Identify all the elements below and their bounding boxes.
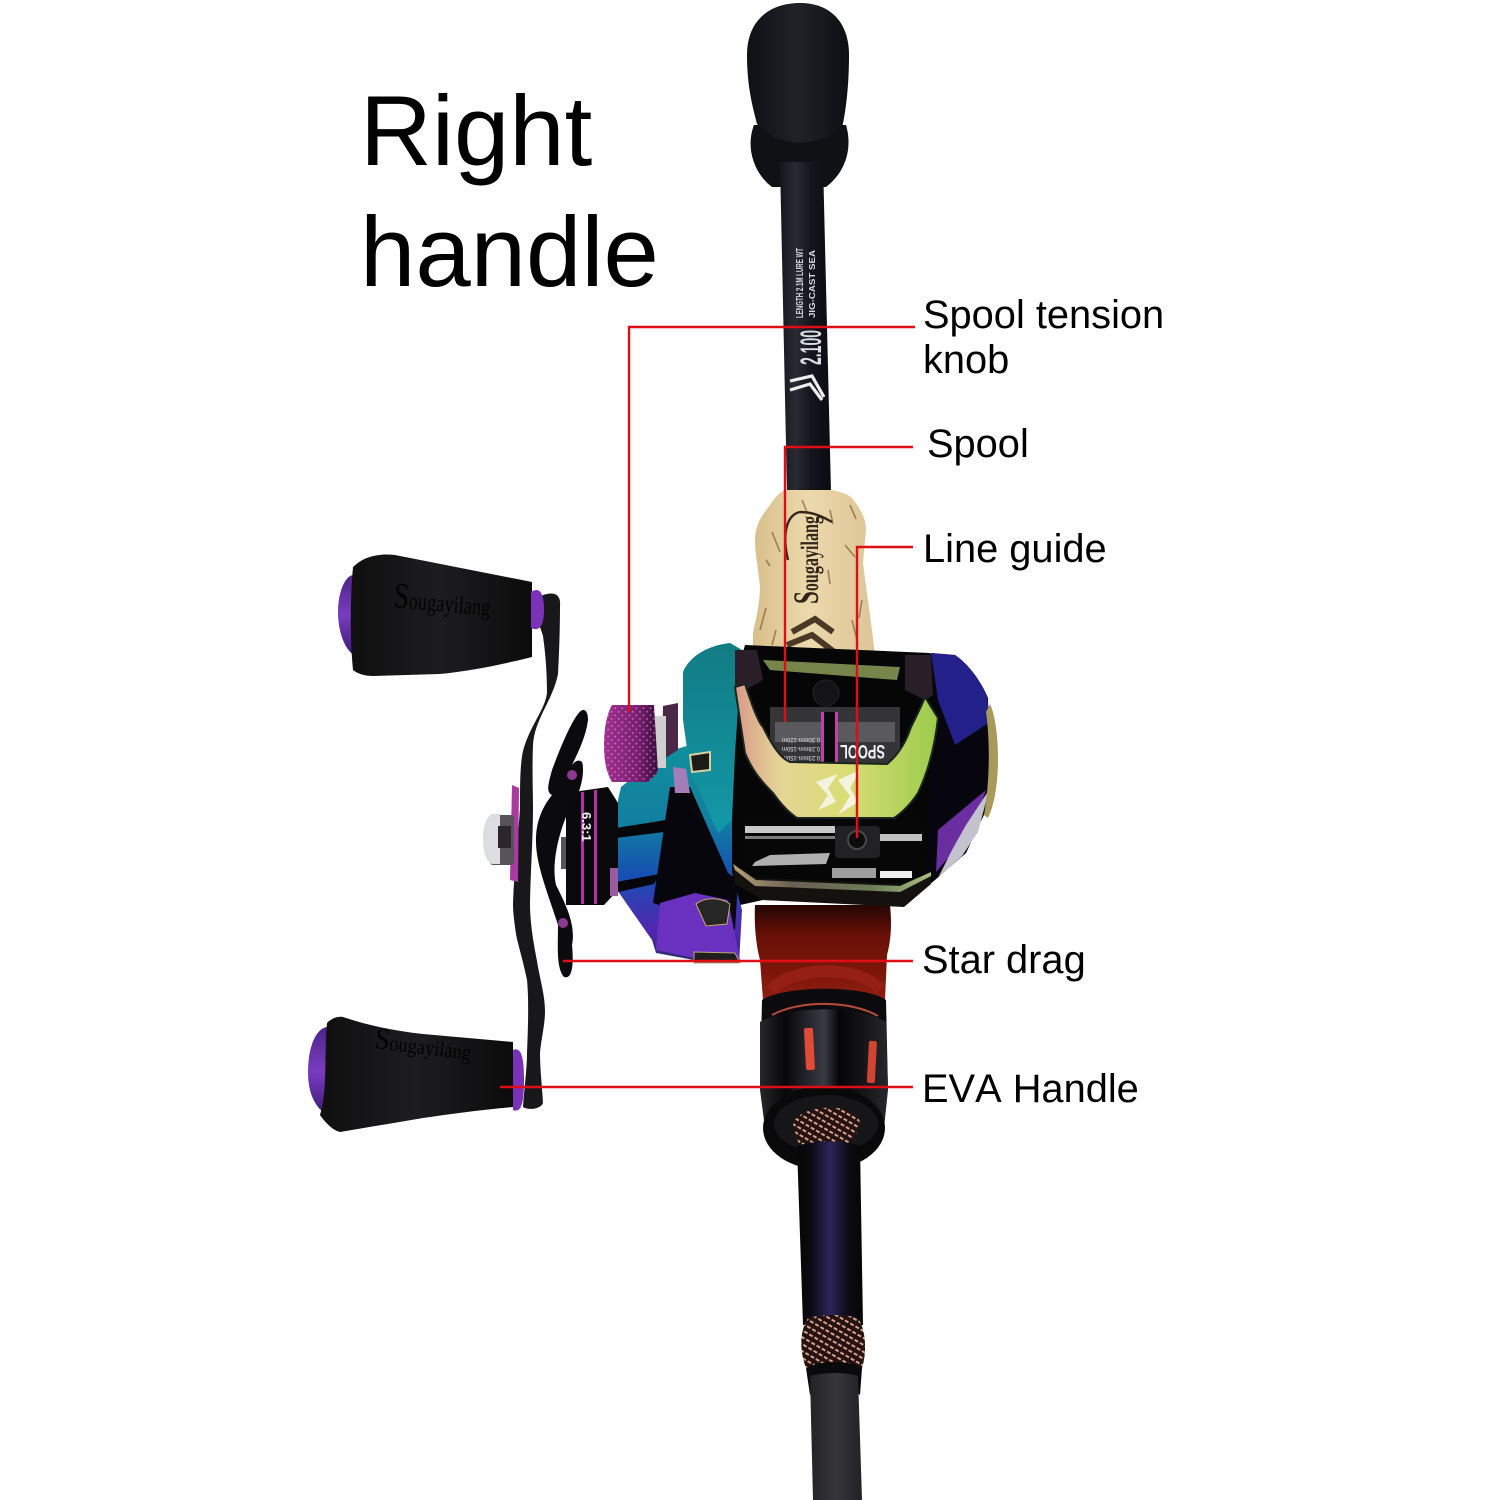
callout: Star drag: Star drag xyxy=(922,938,1086,982)
star drag xyxy=(536,710,588,977)
callout: Spool tension knob: knob xyxy=(923,338,1009,382)
collar rim with braided winding xyxy=(763,1086,885,1170)
reel: spool window xyxy=(763,660,900,767)
spool tension knob xyxy=(604,703,678,782)
rod blank with printed markings xyxy=(780,162,831,492)
spool: 0.28mm-150m xyxy=(782,745,820,752)
rod blank with printed markings: 2.100 xyxy=(795,330,828,365)
reel seat highlight arc xyxy=(771,971,880,990)
lower handle knob: Sougayilang xyxy=(373,1022,474,1067)
spool: 0.23mm-150m xyxy=(782,754,820,761)
reel: gear-side housing xyxy=(615,643,742,963)
callout: Line guide: Line guide xyxy=(923,527,1107,571)
reel: right side plate xyxy=(925,653,998,880)
star drag purple accents xyxy=(558,770,577,928)
cork handle with logo xyxy=(753,490,876,665)
frame logo chevrons xyxy=(816,770,860,815)
callout: Spool: Spool xyxy=(927,422,1029,466)
spool: 0.30mm-120m xyxy=(782,736,820,743)
reel: level wind with line guide xyxy=(745,820,925,878)
upper teal plate xyxy=(683,643,742,833)
rear grip flange xyxy=(751,125,849,187)
callout: Spool xyxy=(785,422,1029,722)
reel: lower iridescent strip xyxy=(732,863,931,907)
callout: EVA Handle: EVA Handle xyxy=(922,1067,1139,1111)
upper handle knob: Sougayilang xyxy=(392,575,492,623)
title: Right handle: handle xyxy=(360,197,659,308)
upper handle knob xyxy=(338,555,544,676)
reel: body base silhouette xyxy=(732,645,990,905)
callout: Spool tension knob xyxy=(629,293,1164,712)
rod blank with printed markings: JIG-CAST SEA xyxy=(808,250,817,318)
spool: SPOOL xyxy=(840,740,885,761)
gear collar with ratio text xyxy=(561,787,618,905)
lower handle knob xyxy=(308,1017,524,1132)
reel seat black locking collar xyxy=(760,989,888,1128)
reel seat red section xyxy=(755,905,891,1000)
reel: U-shaped iridescent frame xyxy=(735,650,938,818)
cork logo text: Sougayilang xyxy=(786,516,826,604)
cork logo swoosh xyxy=(785,512,832,560)
handle nut xyxy=(483,785,519,882)
callout: Spool tension knob: Spool tension xyxy=(923,293,1164,337)
lower winding xyxy=(801,1315,865,1368)
lower rod grip xyxy=(810,1373,862,1500)
title: Right handle: Right xyxy=(360,76,592,187)
gear collar with ratio text: 6.3:1 xyxy=(579,812,594,842)
spool xyxy=(770,707,900,767)
handle arm xyxy=(513,594,560,1109)
rod blank with printed markings: LENGTH 2.1M LURE WT xyxy=(795,248,806,318)
rod butt section xyxy=(797,1142,863,1325)
cork chevrons xyxy=(787,619,833,651)
winding check xyxy=(806,1362,862,1395)
rear foam grip xyxy=(747,3,849,143)
callout: Line guide xyxy=(857,527,1107,838)
title: Right handle xyxy=(360,76,659,308)
